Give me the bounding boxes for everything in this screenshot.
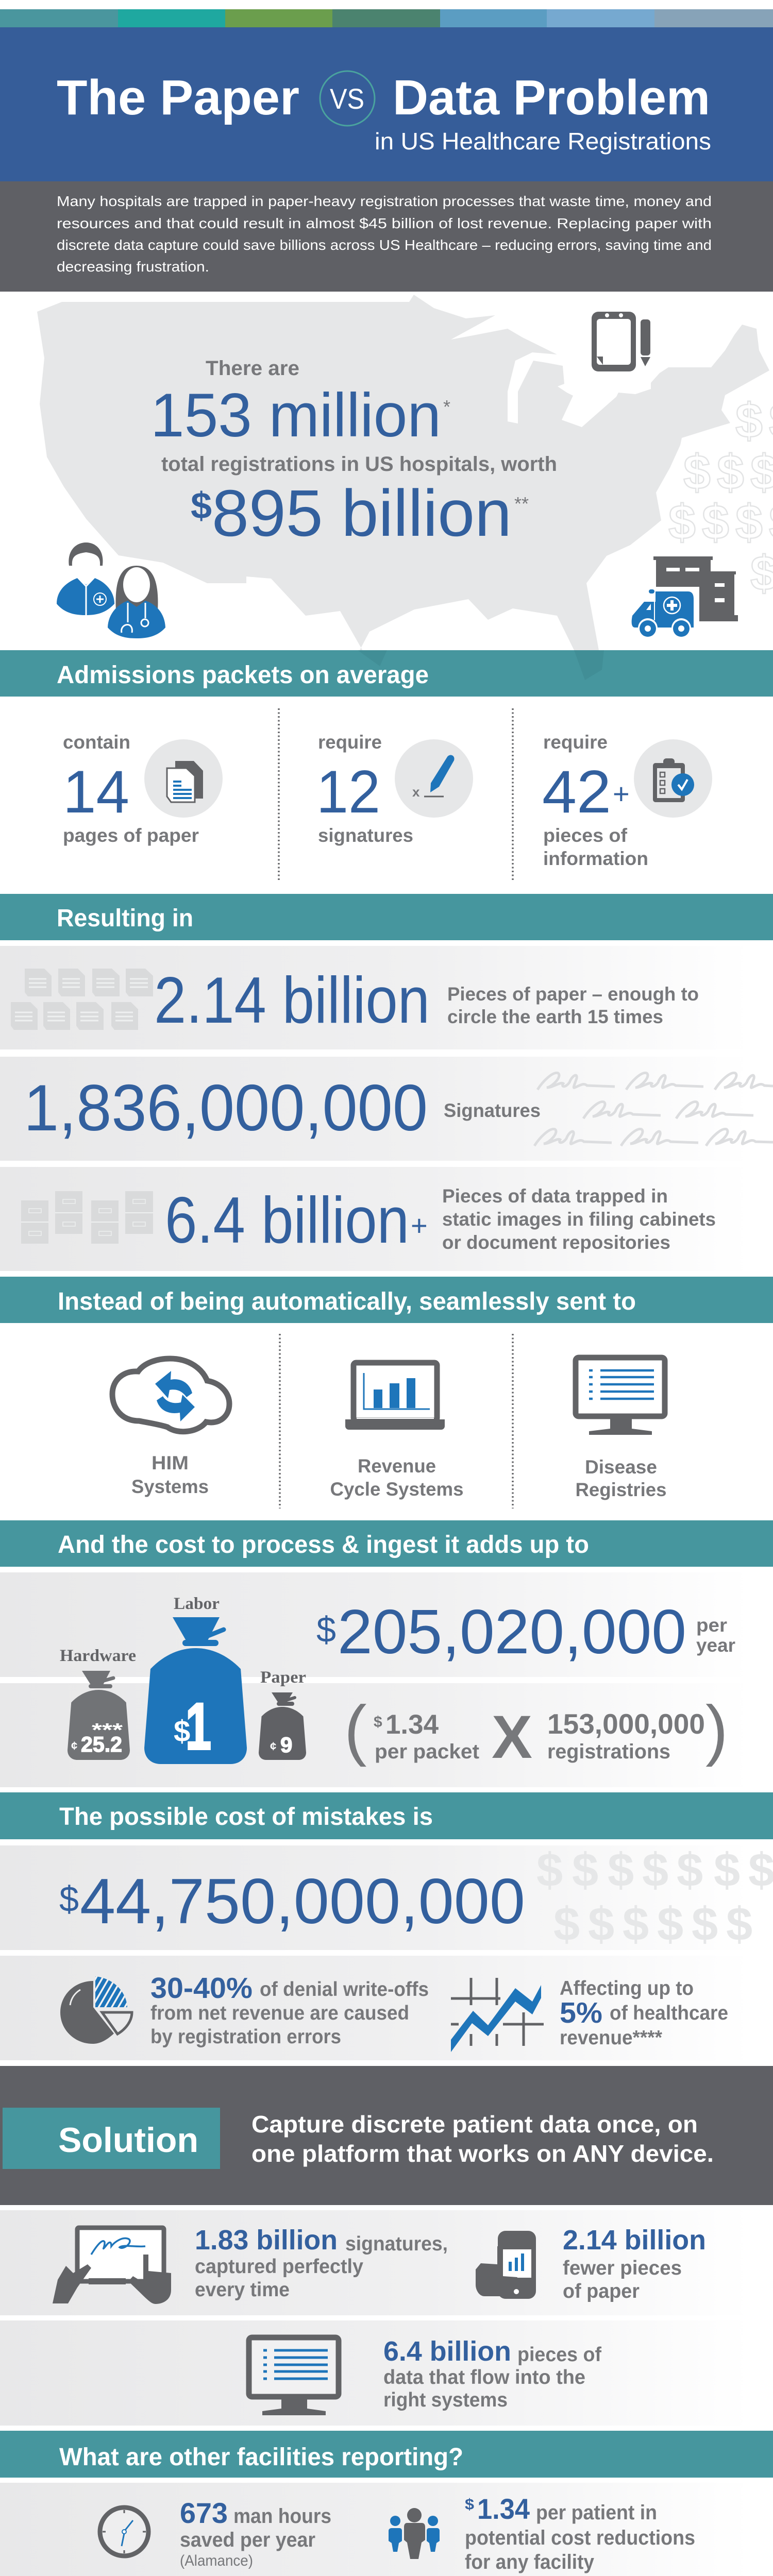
dollar pattern: $ (588, 1898, 614, 1951)
icon: monitor list (249, 2337, 339, 2415)
formula: cost per packet times registrations: X (492, 1703, 532, 1771)
icon: hospital (650, 556, 738, 626)
stat: 42+ pieces: pieces of (543, 825, 628, 846)
text: healthcare revenue: revenue**** (560, 2027, 663, 2049)
icon: phone in hand (476, 2231, 536, 2299)
formula: cost per packet times registrations: $ (374, 1714, 382, 1731)
stat: 153 million: 153 million (150, 381, 441, 450)
bag: hardware: *** (92, 1719, 123, 1740)
chart: cost money bags (60, 1595, 306, 1764)
formula: cost per packet times registrations: 1.34 (385, 1709, 439, 1740)
text: revenue cycle systems: Cycle Systems (330, 1479, 464, 1500)
stat: 42+ pieces: 42 (542, 758, 611, 825)
text: healthcare revenue (560, 1977, 728, 2049)
colour strip (0, 9, 773, 27)
stat: 42+ pieces: + (613, 777, 630, 810)
text: 1.34 per patient: $ (465, 2496, 474, 2513)
dollar pattern: $ (735, 394, 763, 448)
stat: 12 signatures: require (318, 732, 382, 753)
dollar pattern: $ (702, 495, 729, 550)
text: denial write-offs: of denial write-offs (260, 1978, 429, 2001)
text: 1.83 billion signatures: every time (195, 2279, 290, 2301)
intro panel: decreasing frustration. (57, 259, 209, 275)
section heading: instead of: Instead of being automatically, seamlessly sent to (58, 1288, 636, 1315)
text: disease registries: Disease (585, 1456, 657, 1478)
stat: 153 million: * (443, 396, 450, 417)
section heading: cost of mistakes (0, 1792, 773, 1839)
section heading: cost to process (0, 1520, 773, 1567)
solution badge: Solution (58, 2121, 198, 2160)
panel: data flow benefit (0, 2320, 773, 2426)
section heading: other facilities: What are other facilities reporting? (59, 2444, 463, 2471)
intro panel (0, 181, 773, 292)
section heading: other facilities (0, 2431, 773, 2478)
bag: labor (144, 1617, 247, 1764)
text: disease registries: Registries (575, 1479, 667, 1500)
section heading: cost to process: And the cost to process & ingest it adds up to (58, 1531, 589, 1558)
text: 673 man hours: 673 (180, 2497, 228, 2529)
text: 1.34 per patient: per patient in (536, 2501, 657, 2524)
dollar pattern: $ (608, 1844, 634, 1896)
stat: 14 pages: 14 (63, 758, 129, 825)
dollar pattern: $ (553, 1898, 580, 1951)
bag: labor: $ (174, 1715, 190, 1748)
intro panel: discrete data capture could save billions across US Healthcare – reducing errors, saving time and (57, 237, 712, 253)
solution statement (251, 2111, 714, 2167)
label: hardware: Hardware (60, 1647, 136, 1665)
stat: 6.4 billion+: 6.4 billion (165, 1183, 409, 1257)
stat: 42+ pieces: require (543, 732, 608, 753)
bag: paper (259, 1692, 306, 1760)
label: paper: Paper (260, 1668, 306, 1687)
text: HIM systems: Systems (131, 1476, 209, 1497)
bag: hardware (68, 1671, 130, 1760)
text: 1.34 per patient: for any facility (465, 2551, 595, 2573)
text: pieces of data: static images in filing cabinets (442, 1209, 716, 1230)
icon: pen signing (395, 739, 473, 818)
stat: 205,020,000 per year: $ (316, 1609, 336, 1650)
text: 6.4 billion pieces: 6.4 billion (383, 2336, 511, 2367)
panel: facility reports (0, 2483, 773, 2576)
icon: clipboard and pen (592, 312, 650, 371)
icon: filing cabinets (21, 1191, 153, 1244)
stat: 44,750,000,000: 44,750,000,000 (80, 1866, 525, 1937)
icon: pie chart (60, 1976, 132, 2044)
bag: paper: ¢ (270, 1740, 276, 1753)
text: disease registries (575, 1456, 667, 1500)
panel: paper count (0, 946, 773, 1049)
text: pieces of data: Pieces of data trapped in (442, 1185, 668, 1207)
stat: 205,020,000 per year: year (696, 1635, 735, 1656)
bag: labor: 1 (186, 1690, 211, 1764)
dollar pattern: $ (726, 1898, 752, 1951)
icon: monitor list (576, 1358, 665, 1435)
icon: checklist (634, 739, 712, 818)
dollar pattern: $ (536, 1844, 563, 1896)
formula: cost per packet times registrations (344, 1691, 728, 1771)
stat: 42+ pieces: information (543, 848, 648, 869)
formula: cost per packet times registrations: ( (344, 1691, 367, 1767)
icon: pen signing: x (412, 784, 420, 800)
stat: 895 billion: $ (191, 485, 212, 527)
text: 2.14 billion fewer pieces: fewer pieces (563, 2257, 682, 2279)
stat: 44,750,000,000: $ (59, 1879, 79, 1919)
panel: solution (0, 2066, 773, 2205)
stat: 12 signatures: signatures (318, 825, 413, 846)
solution statement: one platform that works on ANY device. (251, 2140, 714, 2167)
panel: processing cost (0, 1572, 773, 1787)
stat: 1,836,000,000: 1,836,000,000 (24, 1071, 428, 1144)
dollar pattern: $ (642, 1844, 668, 1896)
dollar pattern: $ (714, 1844, 740, 1896)
formula: cost per packet times registrations: registrations (547, 1740, 670, 1763)
text: healthcare revenue: 5% (560, 1996, 602, 2029)
stat: 2.14 billion: 2.14 billion (154, 963, 430, 1037)
text: pieces of paper: circle the earth 15 times (447, 1006, 663, 1027)
stat: 205,020,000 per year: per (696, 1615, 727, 1636)
icon: paper pile (11, 969, 153, 1030)
text: 1.83 billion signatures: signatures, (345, 2233, 448, 2255)
stat: 6.4 billion+: + (411, 1209, 428, 1242)
icon: cloud sync (112, 1359, 229, 1432)
section heading: resulting in (0, 894, 773, 940)
text: 1.34 per patient (465, 2493, 695, 2573)
panel: signatures count (0, 1057, 773, 1161)
text: denial write-offs: from net revenue are caused (150, 2002, 409, 2024)
text: signatures: Signatures (444, 1100, 541, 1121)
section heading: instead of (0, 1277, 773, 1323)
dollar pattern: $ (677, 1844, 703, 1896)
text: revenue cycle systems (330, 1455, 464, 1500)
dollar pattern: $ (692, 1898, 718, 1951)
icon: female doctor (108, 566, 165, 638)
text: denial write-offs (150, 1972, 429, 2048)
map panel (37, 295, 773, 680)
text: healthcare revenue: of healthcare (610, 2002, 728, 2024)
text: HIM systems (131, 1452, 209, 1497)
text: 673 man hours (180, 2497, 331, 2569)
dollar pattern: $ (657, 1898, 683, 1951)
icon: falling revenue chart (451, 1978, 544, 2052)
intro panel: resources and that could result in almost $45 billion of lost revenue. Replacing paper with (57, 215, 712, 231)
panel: denial and revenue impact (0, 1956, 773, 2060)
dollar pattern (537, 1851, 773, 1944)
stat: 895 billion: 895 billion (212, 477, 512, 550)
text: denial write-offs: by registration errors (150, 2026, 341, 2048)
text: total registrations: total registrations in US hospitals, worth (161, 453, 557, 476)
dollar pattern: $ (572, 1844, 598, 1896)
subtitle: in US Healthcare Registrations (375, 128, 711, 155)
text: 2.14 billion fewer pieces: of paper (563, 2280, 640, 2302)
text: 673 man hours: man hours (233, 2505, 331, 2528)
intro panel: Many hospitals are trapped in paper-heavy registration processes that waste time, money and (57, 193, 712, 209)
dollar pattern: $ (623, 1898, 649, 1951)
title: The Paper: The Paper (57, 70, 299, 125)
bag: paper: 9 (280, 1733, 292, 1757)
stat: 14 pages: pages of paper (63, 825, 199, 846)
text: 2.14 billion fewer pieces (563, 2225, 706, 2302)
text: 673 man hours: saved per year (180, 2529, 315, 2551)
icon: signature pattern (534, 1073, 773, 1146)
icon: laptop chart (345, 1363, 445, 1430)
text: HIM systems: HIM (152, 1452, 189, 1473)
stat: 12 signatures: 12 (316, 758, 380, 825)
vs badge (320, 71, 375, 126)
dollar pattern: $ (717, 445, 744, 500)
panel: admissions stats (63, 708, 712, 882)
solution statement: Capture discrete patient data once, on (251, 2111, 698, 2138)
text: denial write-offs: 30-40% (150, 1972, 253, 2005)
text: healthcare revenue: Affecting up to (560, 1977, 694, 1999)
text: 6.4 billion pieces: pieces of (517, 2344, 602, 2366)
text: pieces of data: or document repositories (442, 1232, 670, 1253)
text: 1.34 per patient: potential cost reductions (465, 2527, 695, 2549)
text: 6.4 billion pieces: data that flow into the (383, 2366, 585, 2388)
bag: hardware: ¢ (71, 1739, 77, 1752)
stat: 12 signatures (316, 732, 473, 846)
text: pieces of paper: Pieces of paper – enough to (447, 984, 699, 1005)
section heading: admissions (0, 650, 773, 697)
stat: 895 billion: ** (514, 493, 529, 514)
section heading: admissions: Admissions packets on average (57, 662, 429, 689)
stat: 42+ pieces (542, 732, 712, 869)
vs badge: VS (330, 82, 364, 115)
dollar pattern: $ (668, 495, 696, 550)
formula: cost per packet times registrations: per packet (375, 1740, 479, 1763)
stat: 14 pages (63, 732, 223, 846)
panel: data count (0, 1167, 773, 1271)
bag: hardware: 25.2 (81, 1732, 122, 1756)
US map (37, 295, 769, 680)
icon: documents (144, 739, 223, 818)
section heading: resulting in: Resulting in (57, 905, 193, 932)
stat: 205,020,000 per year: 205,020,000 (338, 1597, 686, 1667)
icon: ambulance (632, 589, 694, 638)
text: 6.4 billion pieces (383, 2336, 602, 2411)
text: 1.83 billion signatures: 1.83 billion (195, 2225, 338, 2256)
icon: clock (100, 2507, 148, 2556)
formula: cost per packet times registrations: ) (705, 1691, 728, 1767)
text: 673 man hours: (Alamance) (180, 2552, 253, 2569)
dollar pattern: $ (683, 445, 711, 500)
icon: people group (389, 2508, 440, 2559)
panel: mistakes amount (0, 1844, 773, 1951)
text: there are: There are (206, 357, 299, 380)
text: pieces of data (442, 1185, 716, 1253)
text: 6.4 billion pieces: right systems (383, 2389, 508, 2411)
label: labor: Labor (174, 1595, 220, 1613)
panel: signatures and paper benefits (0, 2210, 773, 2315)
text: pieces of paper (447, 984, 699, 1027)
text: 2.14 billion fewer pieces: 2.14 billion (563, 2225, 706, 2256)
solution badge (3, 2108, 220, 2169)
icon: tablet signing (53, 2228, 171, 2304)
text: 1.83 billion signatures (195, 2225, 448, 2301)
dollar pattern (668, 394, 773, 601)
panel: systems (112, 1334, 667, 1509)
icon: male doctor (57, 543, 114, 615)
text: 1.34 per patient: 1.34 (477, 2493, 530, 2525)
dollar pattern: $ (735, 495, 763, 550)
text: revenue cycle systems: Revenue (358, 1455, 436, 1477)
formula: cost per packet times registrations: 153,000,000 (547, 1708, 705, 1740)
section heading: cost of mistakes: The possible cost of mistakes is (59, 1803, 433, 1831)
title: Data Problem: Data Problem (393, 70, 710, 125)
header panel (0, 27, 773, 181)
text: 1.83 billion signatures: captured perfectly (195, 2256, 363, 2278)
stat: 14 pages: contain (63, 732, 130, 753)
